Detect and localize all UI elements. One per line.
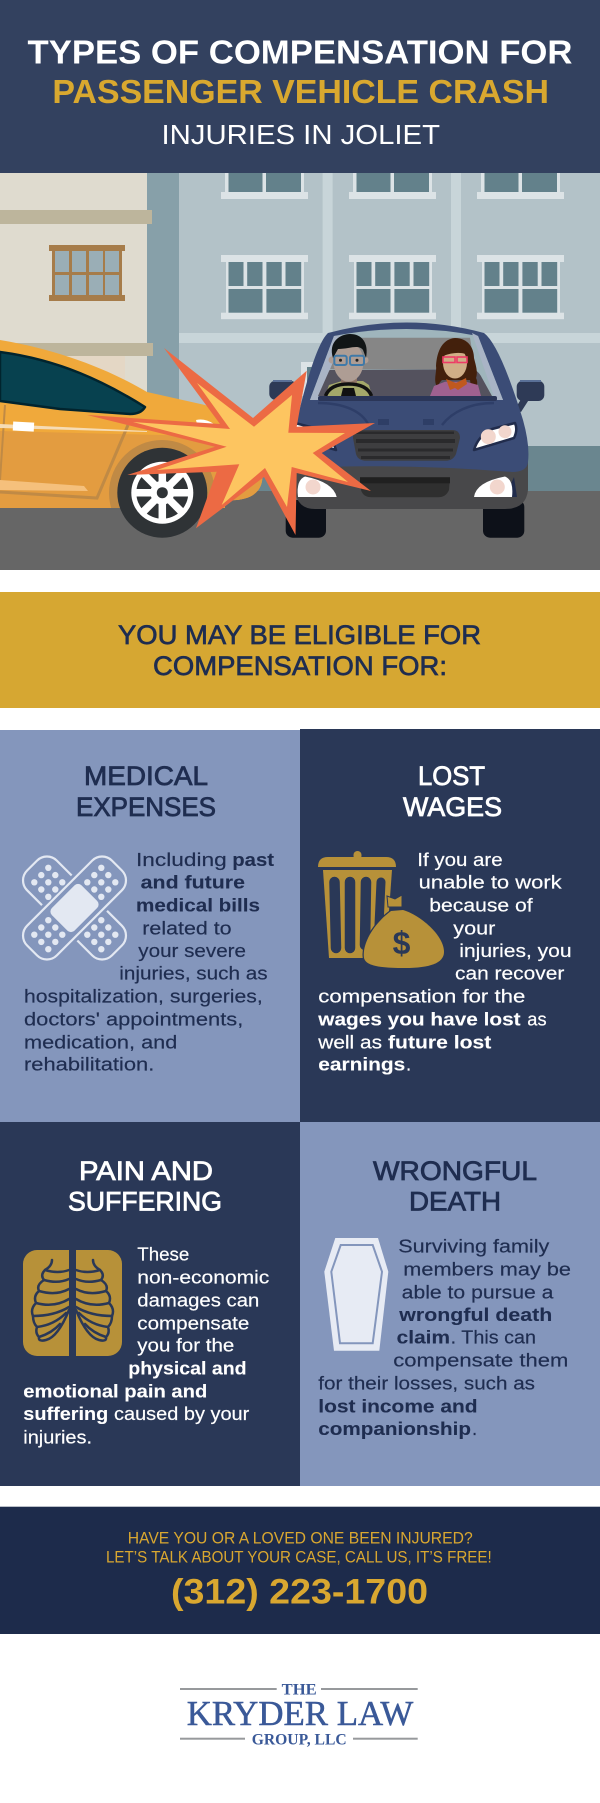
title xyxy=(28,34,573,150)
text: lost wages: . xyxy=(406,1054,411,1075)
logo: the kryder law group xyxy=(180,1681,418,1748)
text: lost wages: unable to work xyxy=(419,872,563,893)
text: lost wages: future lost xyxy=(388,1031,491,1052)
text: pain and suffering: physical and xyxy=(128,1357,247,1378)
icon: rib cage xyxy=(23,1250,122,1356)
car cabin and body xyxy=(294,322,528,472)
text: wrongful death: wrongful death xyxy=(398,1304,552,1325)
heading: lost wages: LOST xyxy=(418,761,485,791)
text: medical expenses: medication, and xyxy=(24,1031,177,1052)
text: medical expenses: rehabilitation. xyxy=(24,1054,154,1075)
wheels xyxy=(286,500,524,538)
text: wrongful death: members may be xyxy=(403,1259,571,1280)
side mirrors xyxy=(269,381,544,412)
text: medical expenses: your severe xyxy=(138,940,246,961)
panel: medical expenses xyxy=(0,730,300,1122)
logo: the kryder law group: KRYDER LAW xyxy=(187,1694,413,1733)
yellow car xyxy=(0,340,262,570)
beige building window xyxy=(49,245,125,301)
heading: lost wages: WAGES xyxy=(403,792,502,822)
panel: call to action: LET’S TALK ABOUT YOUR CASE, CALL US, IT’S FREE! xyxy=(106,1548,492,1566)
dashboard xyxy=(318,396,497,401)
text: pain and suffering: suffering xyxy=(23,1403,108,1424)
title: PASSENGER VEHICLE CRASH xyxy=(52,73,549,110)
text: wrongful death: claim xyxy=(397,1326,450,1347)
text: pain and suffering: you for the xyxy=(137,1335,234,1356)
panel: wrongful death xyxy=(300,1122,600,1486)
text: wrongful death xyxy=(318,1236,571,1439)
headlights xyxy=(294,423,516,450)
illustration: car crash street scene xyxy=(0,173,600,570)
icon: trash can with money bag xyxy=(318,851,444,968)
heading: wrongful death: WRONGFUL xyxy=(373,1156,537,1186)
passenger xyxy=(430,338,481,396)
text: medical expenses: past xyxy=(232,849,274,870)
heading: pain and suffering: PAIN AND xyxy=(79,1156,213,1186)
banner: eligible for compensation: YOU MAY BE ELIGIBLE FOR xyxy=(118,620,481,650)
panel: lost wages xyxy=(300,729,600,1122)
heading: medical expenses: EXPENSES xyxy=(76,792,216,822)
hood details xyxy=(318,403,494,425)
text: pain and suffering: injuries. xyxy=(23,1426,92,1447)
icon: coffin xyxy=(324,1238,388,1351)
text: lost wages: as xyxy=(527,1008,547,1029)
lower grille xyxy=(360,477,450,497)
text: medical expenses: hospitalization, surgeries, xyxy=(24,986,263,1007)
banner: eligible for compensation: COMPENSATION FOR: xyxy=(153,651,447,681)
icon: crossed bandages xyxy=(13,846,136,970)
phone number: (312) 223-1700 xyxy=(171,1572,428,1611)
heading: pain and suffering: SUFFERING xyxy=(68,1187,222,1217)
title: INJURIES IN JOLIET xyxy=(162,119,440,150)
panel: call to action xyxy=(0,1507,600,1634)
logo: the kryder law group: GROUP, LLC xyxy=(252,1731,347,1748)
heading: medical expenses xyxy=(76,761,216,822)
text: lost wages: If you are xyxy=(417,849,503,870)
heading: wrongful death xyxy=(373,1156,537,1217)
text: lost wages xyxy=(317,849,572,1075)
text: medical expenses: related to xyxy=(142,917,232,938)
text: pain and suffering: non-economic xyxy=(137,1266,269,1287)
text: wrongful death: . This can xyxy=(451,1326,536,1347)
text: lost wages: injuries, you xyxy=(459,940,572,961)
title: TYPES OF COMPENSATION FOR xyxy=(28,34,573,70)
heading: wrongful death: DEATH xyxy=(409,1187,501,1217)
heading: lost wages xyxy=(403,761,502,822)
text: lost wages: can recover xyxy=(455,963,564,984)
panel: header xyxy=(0,0,600,173)
text: wrongful death: compensate them xyxy=(393,1350,568,1371)
text: lost wages: well as xyxy=(317,1031,382,1052)
text: medical expenses xyxy=(24,849,274,1075)
text: lost wages: your xyxy=(453,917,495,938)
text: lost wages: wages you have lost xyxy=(317,1008,521,1029)
text: medical expenses: medical bills xyxy=(136,895,260,916)
text: medical expenses: Including xyxy=(136,849,227,870)
banner: eligible for compensation xyxy=(0,592,600,708)
buildings xyxy=(0,173,600,493)
text: medical expenses: and future xyxy=(141,872,245,893)
icon: trash can with money bag: $ xyxy=(393,925,411,961)
road xyxy=(0,491,600,570)
text: pain and suffering: These xyxy=(137,1244,189,1265)
heading: medical expenses: MEDICAL xyxy=(84,761,208,791)
text: pain and suffering: damages can xyxy=(137,1290,259,1311)
text: medical expenses: doctors' appointments, xyxy=(24,1008,243,1029)
text: lost wages: earnings xyxy=(318,1054,405,1075)
text: lost wages: compensation for the xyxy=(318,986,525,1007)
text: pain and suffering: emotional pain and xyxy=(23,1380,207,1401)
grille xyxy=(353,430,460,461)
text: wrongful death: . xyxy=(472,1418,477,1439)
impact burst xyxy=(87,348,375,535)
text: lost wages: because of xyxy=(429,895,534,916)
text: wrongful death: for their losses, such as xyxy=(318,1372,535,1393)
logo: the kryder law group: THE xyxy=(282,1681,317,1698)
text: pain and suffering xyxy=(23,1244,269,1447)
text: wrongful death: lost income and xyxy=(318,1395,478,1416)
blue car xyxy=(269,322,544,538)
fog lights xyxy=(298,476,517,497)
text: pain and suffering: compensate xyxy=(137,1312,249,1333)
text: wrongful death: Surviving family xyxy=(398,1236,550,1257)
text: wrongful death: companionship xyxy=(318,1418,471,1439)
text: pain and suffering: caused by your xyxy=(114,1403,249,1424)
panel: call to action: HAVE YOU OR A LOVED ONE BEEN INJURED? xyxy=(128,1529,473,1547)
heading: pain and suffering xyxy=(68,1156,222,1217)
driver xyxy=(325,334,372,396)
text: medical expenses: injuries, such as xyxy=(119,963,268,984)
panel: pain and suffering xyxy=(0,1122,300,1486)
bumper xyxy=(295,455,528,509)
text: wrongful death: able to pursue a xyxy=(402,1281,554,1302)
